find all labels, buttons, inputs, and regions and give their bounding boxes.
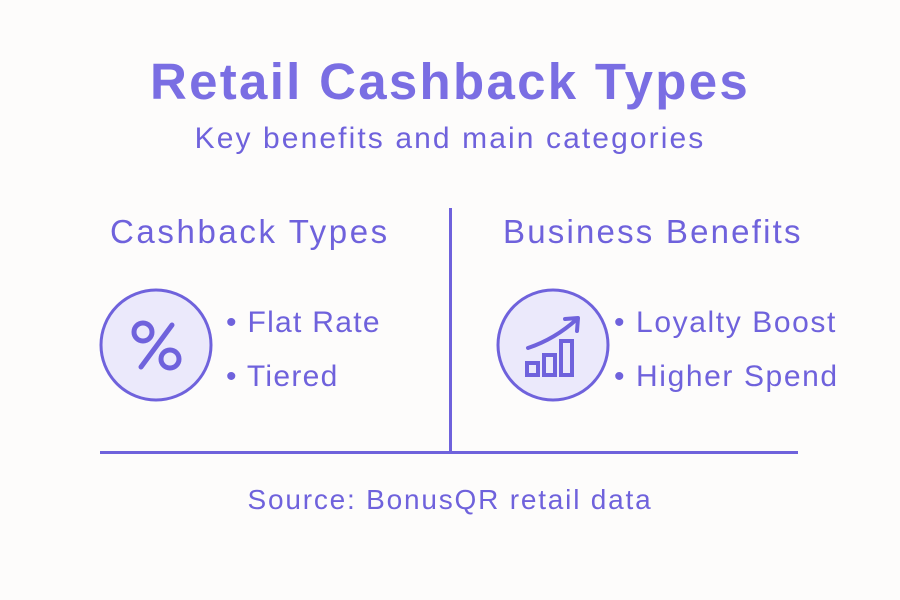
bullets: cashback types: • Tiered <box>226 360 339 393</box>
source: Source: BonusQR retail data <box>247 484 652 515</box>
bullets: business benefits <box>614 306 839 393</box>
heading: cashback types: Cashback Types <box>110 213 390 250</box>
bullets: business benefits: • Higher Spend <box>614 360 839 393</box>
heading: business benefits: Business Benefits <box>503 213 803 250</box>
subtitle: Key benefits and main categories <box>195 122 705 155</box>
icon: growth chart <box>496 288 610 402</box>
bullets: cashback types: • Flat Rate <box>226 306 381 339</box>
icon: percent <box>100 288 212 402</box>
bullets: cashback types <box>226 306 381 393</box>
bullets: business benefits: • Loyalty Boost <box>614 306 837 339</box>
vertical divider <box>449 208 452 452</box>
horizontal divider <box>100 451 798 454</box>
title: Retail Cashback Types <box>150 53 750 110</box>
